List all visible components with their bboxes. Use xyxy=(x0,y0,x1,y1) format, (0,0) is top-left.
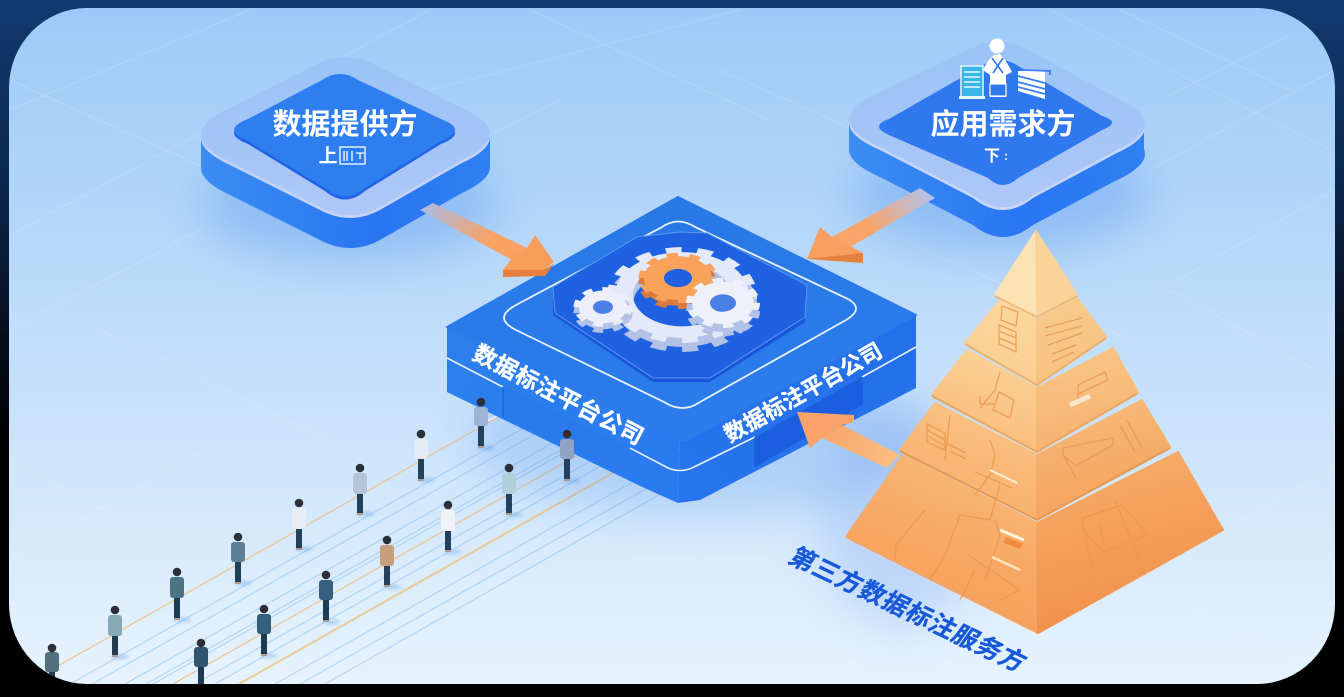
label: platform company right side: 数据标注平台公司 xyxy=(720,338,887,447)
demander block side xyxy=(849,123,1145,237)
tier 4 xyxy=(900,400,1170,520)
heading: application demander: 应用需求方 xyxy=(930,108,1076,141)
person 15 xyxy=(194,639,208,684)
panel: application demander block xyxy=(849,38,1145,237)
person 7 xyxy=(108,606,129,660)
platform white inset outline xyxy=(504,222,856,408)
floor connection lines xyxy=(46,416,660,684)
platform top face xyxy=(447,197,916,441)
person 10 xyxy=(502,464,523,518)
person 12 xyxy=(380,536,401,590)
platform left recess xyxy=(503,387,630,476)
pyramid engraved details xyxy=(895,306,1148,600)
soft shadows xyxy=(200,137,1150,630)
inner hexagon recess xyxy=(553,232,807,382)
panel: pyramid of third-party service providers xyxy=(846,231,1223,633)
person 9 xyxy=(560,430,581,484)
data provider inner face xyxy=(234,74,455,200)
person 6 xyxy=(170,568,191,622)
label: upstream: 上 xyxy=(318,145,338,167)
label: colon mark: : xyxy=(1004,149,1008,163)
person 11 xyxy=(441,501,462,554)
person 5 xyxy=(231,533,252,586)
person 4 xyxy=(292,499,313,552)
tier 1 apex xyxy=(995,231,1077,317)
tier 2 xyxy=(965,298,1106,385)
icon: large gear xyxy=(614,251,750,348)
person 8 xyxy=(45,644,59,686)
heading: data provider: 数据提供方 xyxy=(272,108,418,141)
platform right darker recess xyxy=(755,377,862,467)
platform side lines xyxy=(447,347,916,470)
arrow: demander to platform xyxy=(807,188,935,263)
person 2 xyxy=(414,430,435,482)
person 1 xyxy=(474,398,495,450)
icon: orange gear xyxy=(644,256,712,306)
platform right side xyxy=(678,315,916,503)
demander translucent plate xyxy=(849,41,1145,210)
label: third-party annotation provider: 第三方数据标注服务方 xyxy=(783,543,1033,677)
icon: document screen xyxy=(959,66,985,99)
icon: small left gear xyxy=(578,290,628,330)
data provider block side xyxy=(201,138,490,248)
icon: person xyxy=(983,38,1012,97)
data provider translucent plate xyxy=(201,57,490,218)
label: platform company left side: 数据标注平台公司 xyxy=(469,340,648,450)
panel: data annotation platform block xyxy=(447,197,916,503)
icon: right gear xyxy=(691,281,755,333)
isometric floor grid xyxy=(10,10,1334,424)
arrow: provider to platform xyxy=(420,203,554,277)
person 13 xyxy=(319,571,340,624)
demander inner face xyxy=(879,60,1112,185)
label: downstream: 下 xyxy=(984,148,1000,165)
tier 3 xyxy=(932,348,1138,452)
panel: data provider block xyxy=(201,57,490,248)
platform left side xyxy=(447,327,680,503)
icon: data stack xyxy=(1018,70,1050,99)
icon: upstream panel xyxy=(340,147,365,164)
arrow: pyramid to platform xyxy=(797,412,900,468)
person 14 xyxy=(257,605,278,658)
tier 5 xyxy=(846,452,1223,633)
person 3 xyxy=(353,464,374,516)
